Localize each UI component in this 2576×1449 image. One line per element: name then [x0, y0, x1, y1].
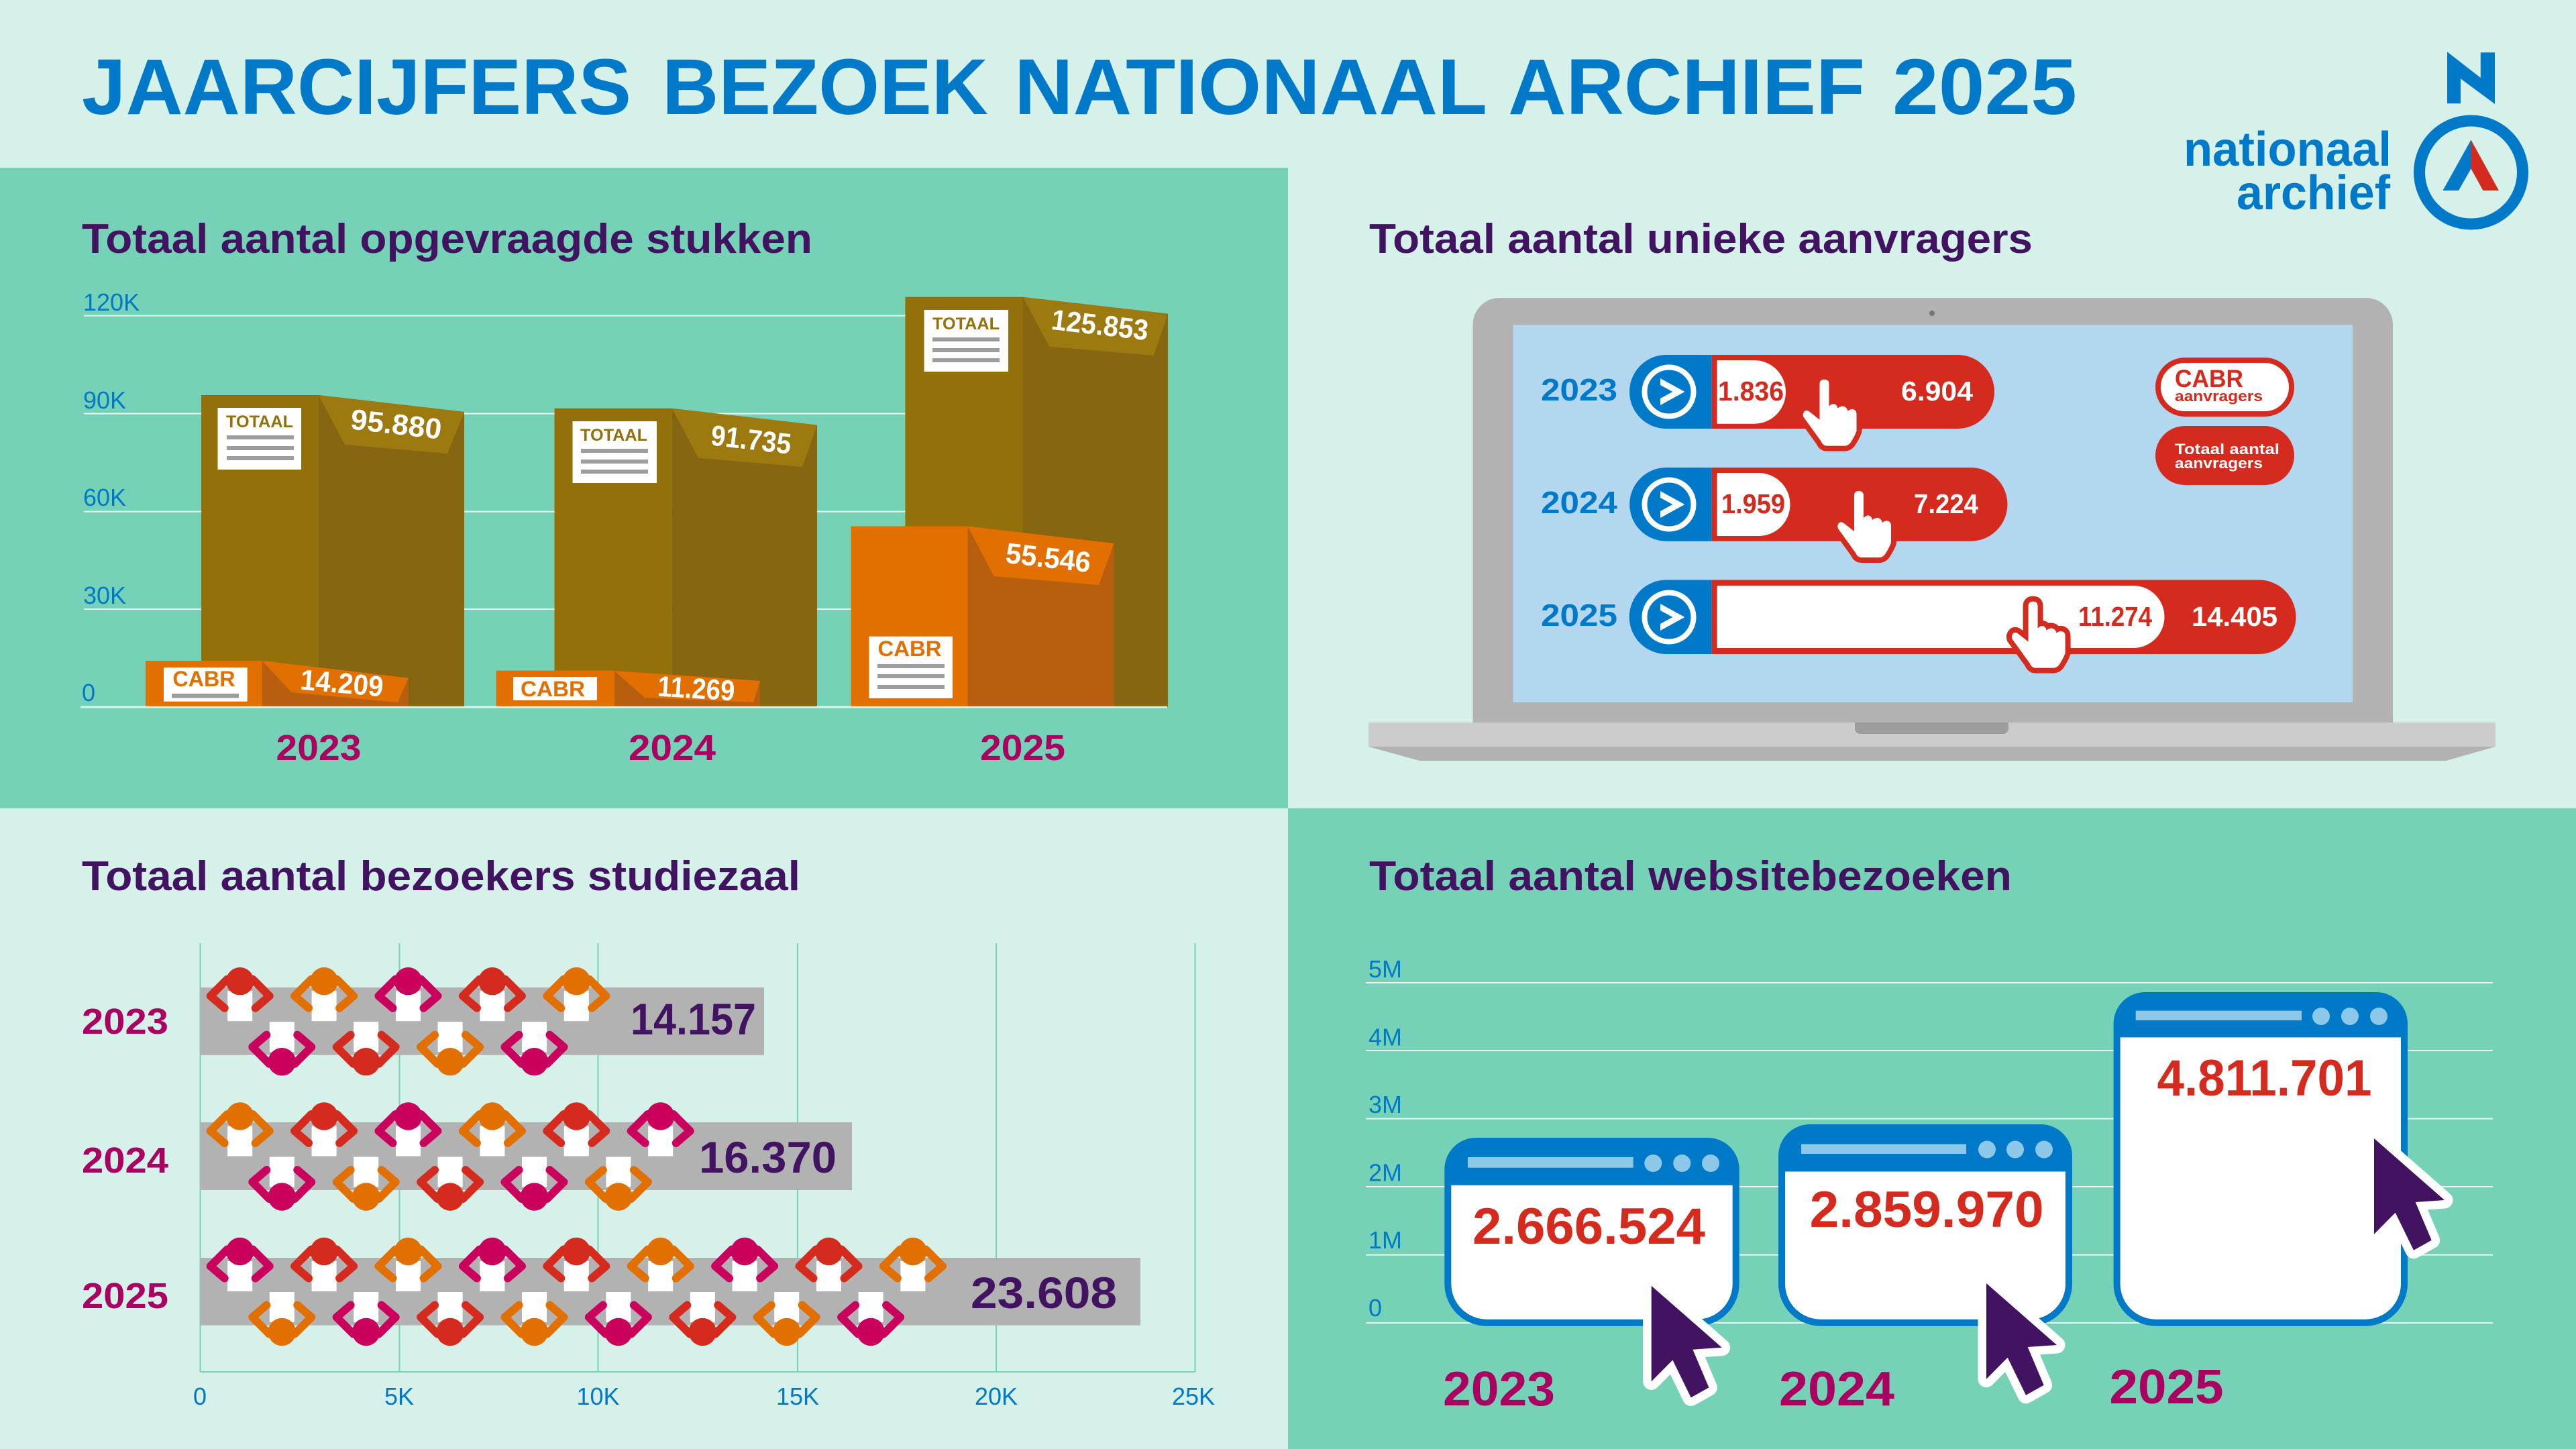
- panel: Totaal aantal websitebezoeken: [1366, 853, 2493, 1416]
- grid and x axis labels: [193, 943, 1215, 1410]
- window: 2025: 4.811.701: [2157, 1050, 2372, 1107]
- grid and x axis labels: 0: [193, 1383, 207, 1410]
- y axis grid and labels: 3M: [1368, 1091, 1402, 1118]
- heading: websitebezoeken: Totaal aantal websitebezoeken: [1369, 853, 2012, 900]
- y axis grid and labels: [1366, 955, 2493, 1323]
- bar: totaal 2023: 95.880: [349, 404, 443, 446]
- window: 2023: 2.666.524: [1472, 1198, 1705, 1255]
- row: bezoekers 2023: 2023: [82, 1002, 168, 1042]
- logo: Nationaal Archief: [2184, 52, 2522, 224]
- bar: totaal 2023: [201, 395, 464, 707]
- row: bezoekers 2024: 2024: [82, 1140, 168, 1181]
- title: [82, 43, 2077, 131]
- row: bezoekers 2025: 23.608: [971, 1268, 1117, 1318]
- legend: [2155, 360, 2294, 485]
- row: aanvragers 2025: 11.274: [2078, 601, 2152, 632]
- bar: CABR 2024: [496, 671, 760, 707]
- x axis labels: years: 2025: [980, 728, 1065, 768]
- heading: aanvragers: Totaal aantal unieke aanvragers: [1369, 216, 2033, 262]
- y axis grid and labels: 4M: [1368, 1024, 1402, 1051]
- x axis labels: years: 2024: [629, 728, 716, 768]
- x axis labels: years: [1443, 1360, 2223, 1416]
- row: bezoekers 2025: 2025: [82, 1276, 168, 1316]
- grid and x axis labels: 25K: [1172, 1383, 1215, 1410]
- bar: totaal 2023: TOTAAL: [226, 413, 293, 431]
- grid and x axis labels: 10K: [576, 1383, 620, 1410]
- heading: stukken: Totaal aantal opgevraagde stukken: [82, 216, 812, 262]
- y axis grid and labels: 0: [82, 679, 95, 706]
- bar: totaal 2024: TOTAAL: [580, 426, 647, 445]
- y axis grid and labels: 120K: [83, 288, 140, 316]
- y axis grid and labels: 90K: [83, 386, 126, 414]
- bar: totaal 2024: [554, 409, 817, 707]
- legend: Totaal aantal: [2175, 441, 2279, 458]
- panel background: websitebezoeken: [1288, 808, 2576, 1449]
- row: bezoekers 2024: 16.370: [699, 1132, 837, 1182]
- x axis labels: years: 2023: [1443, 1362, 1555, 1416]
- row: bezoekers 2023: 14.157: [631, 994, 756, 1044]
- panel: Totaal aantal unieke aanvragers: [1368, 216, 2496, 761]
- bar: totaal 2025: [905, 297, 1168, 707]
- y axis grid and labels: 1M: [1368, 1226, 1402, 1254]
- row: aanvragers 2023: 2023: [1541, 372, 1617, 407]
- y axis grid and labels: 30K: [83, 582, 126, 609]
- window: 2024: 2.859.970: [1810, 1181, 2044, 1238]
- legend: aanvragers: [2175, 388, 2263, 405]
- panel: Totaal aantal opgevraagde stukken: [80, 216, 1168, 768]
- row: aanvragers 2025: 2025: [1541, 598, 1617, 633]
- title: JAARCIJFERS: [82, 43, 631, 131]
- bar: CABR 2025: [851, 526, 1114, 707]
- bar: CABR 2025: 55.546: [1004, 537, 1092, 579]
- x axis labels: years: 2023: [276, 728, 361, 768]
- bar: CABR 2025: CABR: [877, 637, 942, 661]
- row: aanvragers 2025: [1541, 580, 2296, 668]
- logo: Nationaal Archief: archief: [2237, 166, 2391, 220]
- y axis grid and labels: 60K: [83, 484, 126, 511]
- x axis labels: years: 2024: [1779, 1362, 1894, 1416]
- title: 2025: [1892, 43, 2077, 131]
- y axis grid and labels: 5M: [1368, 955, 1402, 983]
- grid and x axis labels: 5K: [384, 1383, 414, 1410]
- bar: CABR 2023: [146, 661, 409, 707]
- laptop: [1368, 298, 2496, 761]
- grid and x axis labels: 20K: [975, 1383, 1018, 1410]
- row: aanvragers 2023: 1.836: [1718, 376, 1784, 407]
- y axis grid and labels: 0: [1368, 1294, 1382, 1322]
- bar: totaal 2025: TOTAAL: [932, 315, 1000, 333]
- row: aanvragers 2024: 2024: [1541, 485, 1617, 520]
- bar: CABR 2024: 11.269: [657, 671, 736, 707]
- row: bezoekers 2025: [82, 1238, 1140, 1346]
- y axis grid and labels: [82, 288, 1167, 706]
- title: NATIONAAL: [1014, 43, 1487, 131]
- bar: CABR 2023: CABR: [173, 667, 235, 691]
- title: ARCHIEF: [1508, 43, 1865, 131]
- panel: Totaal aantal bezoekers studiezaal: [82, 853, 1215, 1410]
- bar: CABR 2023: 14.209: [299, 664, 385, 703]
- bar: totaal 2024: 91.735: [709, 419, 793, 461]
- row: aanvragers 2024: 7.224: [1914, 488, 1978, 519]
- panel background: stukken: [0, 168, 1288, 808]
- bar: totaal 2025: 125.853: [1050, 304, 1150, 347]
- legend: CABR: [2175, 365, 2243, 392]
- heading: studiezaal: Totaal aantal bezoekers studiezaal: [82, 853, 800, 900]
- window: 2025: [2114, 992, 2445, 1326]
- row: bezoekers 2023: [82, 967, 764, 1075]
- bar: CABR 2024: CABR: [521, 677, 585, 701]
- row: aanvragers 2024: [1541, 468, 2007, 557]
- x axis labels: years: 2025: [2109, 1360, 2223, 1414]
- title: BEZOEK: [662, 43, 988, 131]
- logo: Nationaal Archief: nationaal: [2184, 123, 2392, 176]
- grid and x axis labels: 15K: [776, 1383, 819, 1410]
- row: aanvragers 2025: 14.405: [2192, 601, 2277, 632]
- row: bezoekers 2024: [82, 1102, 852, 1211]
- y axis grid and labels: 2M: [1368, 1159, 1402, 1187]
- legend: aanvragers: [2175, 455, 2263, 472]
- x axis labels: years: [276, 728, 1065, 768]
- row: aanvragers 2024: 1.959: [1721, 488, 1785, 519]
- row: aanvragers 2023: [1541, 355, 1994, 446]
- window: 2023: [1444, 1138, 1739, 1397]
- row: aanvragers 2023: 6.904: [1901, 376, 1973, 407]
- window: 2024: [1778, 1124, 2072, 1395]
- x axis baseline: [80, 706, 1167, 708]
